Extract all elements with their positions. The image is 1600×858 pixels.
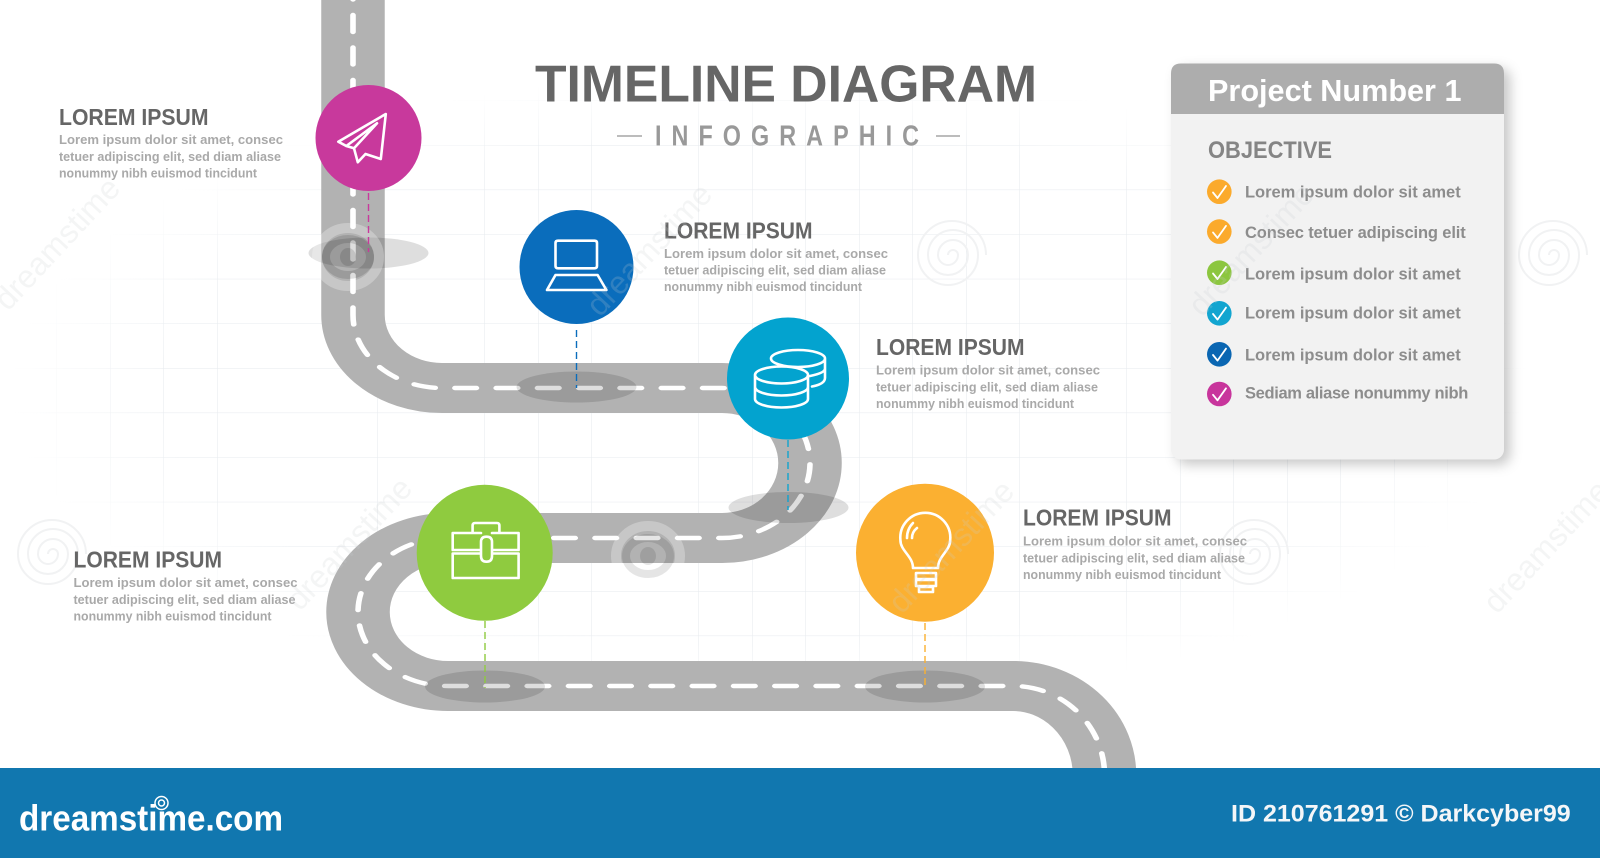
text block: milestone 2: Lorem ipsum dolor sit amet, consec: [664, 246, 888, 261]
text block: milestone 5: nonummy nibh euismod tincidunt: [1023, 567, 1222, 582]
milestone 3: cyan circle with coins: [727, 318, 849, 440]
connector: yellow dashed line: [924, 623, 926, 688]
icon: light bulb: [900, 513, 950, 592]
text block: milestone 2: tetuer adipiscing elit, sed diam aliase: [664, 263, 886, 278]
winding road: [353, 0, 1105, 800]
milestone 2: blue circle with laptop: [520, 210, 634, 324]
watermark text: dreamstime: [881, 473, 1021, 620]
brand wordmark: dreamstime.com: [19, 798, 283, 839]
text block: milestone 4: tetuer adipiscing elit, sed diam aliase: [74, 592, 296, 607]
text block: milestone 5: [1023, 504, 1247, 582]
subtitle: INFOGRAPHIC: [655, 119, 919, 152]
text block: milestone 1: tetuer adipiscing elit, sed diam aliase: [59, 149, 281, 164]
text block: milestone 2: LOREM IPSUM: [664, 217, 812, 243]
title: TIMELINE DIAGRAM: [535, 56, 1037, 114]
panel background: [1171, 64, 1504, 460]
text block: milestone 2: nonummy nibh euismod tincidunt: [664, 279, 863, 294]
connector: magenta dashed line: [368, 193, 370, 252]
watermark text: dreamstime: [1181, 176, 1321, 323]
image id and credit: ID 210761291 © Darkcyber99: [1231, 801, 1571, 828]
watermark text: dreamstime: [579, 176, 719, 323]
text block: milestone 3: Lorem ipsum dolor sit amet, consec: [876, 362, 1100, 378]
connector: cyan dashed line: [787, 440, 789, 510]
text block: milestone 4: Lorem ipsum dolor sit amet, consec: [74, 575, 298, 590]
text block: milestone 2: [664, 217, 888, 294]
checklist item 5: Lorem ipsum dolor sit amet: [1245, 346, 1461, 364]
text block: milestone 5: LOREM IPSUM: [1023, 504, 1172, 530]
panel header bar: [1171, 64, 1504, 114]
checklist item 3: Lorem ipsum dolor sit amet: [1245, 265, 1461, 283]
connector: blue dashed line: [576, 330, 578, 388]
checklist item 1: Lorem ipsum dolor sit amet: [1245, 184, 1461, 202]
text block: milestone 1: Lorem ipsum dolor sit amet, consec: [59, 132, 283, 147]
text block: milestone 4: nonummy nibh euismod tincidunt: [74, 609, 272, 624]
text block: milestone 4: [74, 547, 298, 624]
panel heading: Project Number 1: [1208, 73, 1462, 108]
text block: milestone 3: tetuer adipiscing elit, sed diam aliase: [876, 379, 1098, 394]
checklist item 6: Sediam aliase nonummy nibh: [1245, 385, 1468, 403]
icon: paper plane: [338, 114, 386, 162]
milestone 1: magenta circle with paper plane: [316, 85, 422, 191]
background grid: [62, 92, 1448, 661]
checklist item 5: [1207, 342, 1461, 367]
watermark text: dreamstime: [279, 470, 419, 617]
watermark spirals on road: [317, 228, 680, 586]
checklist item 1: [1207, 179, 1461, 204]
footer banner: [0, 768, 1600, 858]
text block: milestone 5: Lorem ipsum dolor sit amet, consec: [1023, 534, 1247, 548]
icon: coins: [755, 350, 825, 408]
text block: milestone 3: nonummy nibh euismod tincidunt: [876, 396, 1075, 411]
text block: milestone 3: [876, 334, 1100, 411]
text block: milestone 1: LOREM IPSUM: [59, 104, 208, 130]
objective label: OBJECTIVE: [1208, 137, 1332, 164]
checklist item 3: [1207, 260, 1461, 285]
checklist item 2: [1207, 219, 1466, 244]
text block: milestone 1: nonummy nibh euismod tincidunt: [59, 166, 258, 181]
checklist item 4: Lorem ipsum dolor sit amet: [1245, 305, 1461, 323]
checklist item 4: [1207, 301, 1461, 326]
text block: milestone 4: LOREM IPSUM: [74, 547, 222, 573]
text block: milestone 1: [59, 104, 283, 181]
panel: project objectives: [1171, 64, 1504, 460]
checklist item 6: [1207, 382, 1468, 406]
milestone 5: yellow circle with light bulb: [856, 484, 994, 622]
connector: green dashed line: [484, 621, 486, 688]
milestone shadows on road: [308, 238, 985, 702]
icon: briefcase: [453, 523, 519, 578]
icon: laptop: [547, 241, 606, 290]
text block: milestone 3: LOREM IPSUM: [876, 334, 1024, 360]
milestone 4: green circle with briefcase: [417, 485, 553, 621]
watermark spirals on white background: [18, 221, 1587, 584]
text block: milestone 5: tetuer adipiscing elit, sed diam aliase: [1023, 550, 1245, 565]
icon: brand spiral: [155, 796, 168, 810]
checklist item 2: Consec tetuer adipiscing elit: [1245, 224, 1466, 242]
watermark text: [0, 170, 1600, 620]
